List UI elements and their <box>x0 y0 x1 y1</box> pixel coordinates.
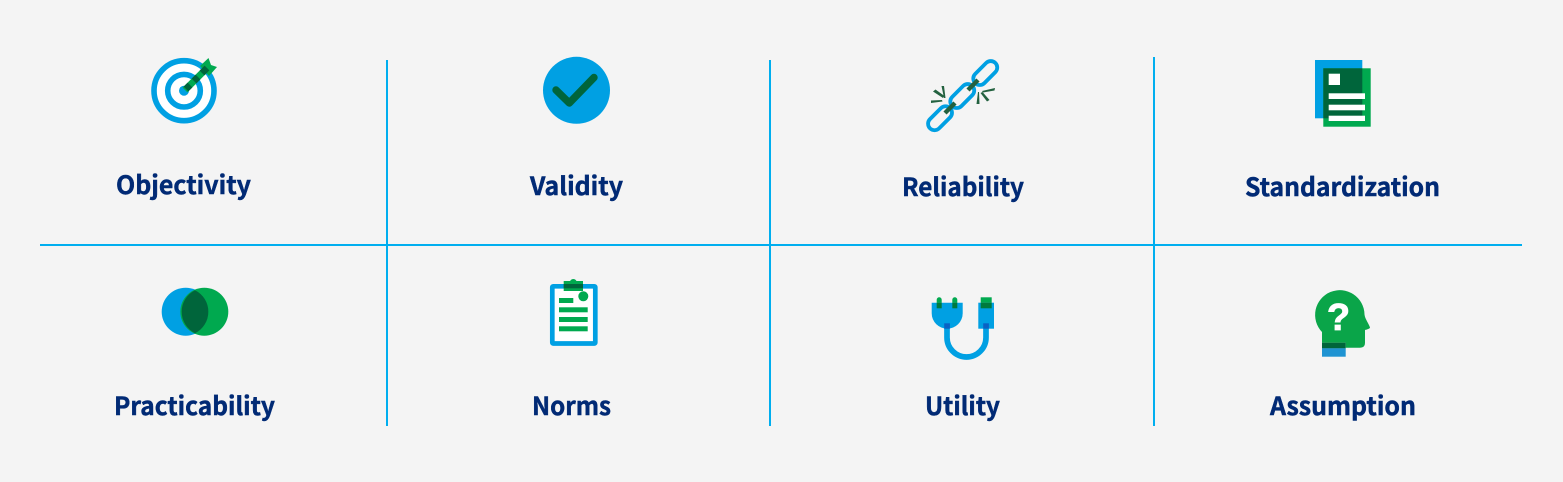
icon: plug and cable <box>932 297 994 357</box>
label: Practicability: Practicability <box>114 387 276 423</box>
label: Assumption: Assumption <box>1269 387 1416 423</box>
icon: overlapping circles <box>162 288 228 336</box>
icon: document stack <box>1315 60 1371 127</box>
label: Objectivity: Objectivity <box>116 166 252 202</box>
label: Norms: Norms <box>532 387 611 423</box>
icon: head with question mark: ? <box>1327 297 1350 339</box>
icon: clipboard <box>552 279 595 344</box>
label: Utility: Utility <box>925 387 1001 423</box>
icon: breaking chain <box>925 58 1000 133</box>
icon: check mark <box>543 57 610 124</box>
label: Reliability: Reliability <box>902 168 1025 204</box>
label: Standardization: Standardization <box>1245 168 1440 204</box>
label: Validity: Validity <box>529 167 624 203</box>
icon: target with arrow <box>154 58 217 121</box>
icon: head with question mark <box>1315 290 1370 357</box>
